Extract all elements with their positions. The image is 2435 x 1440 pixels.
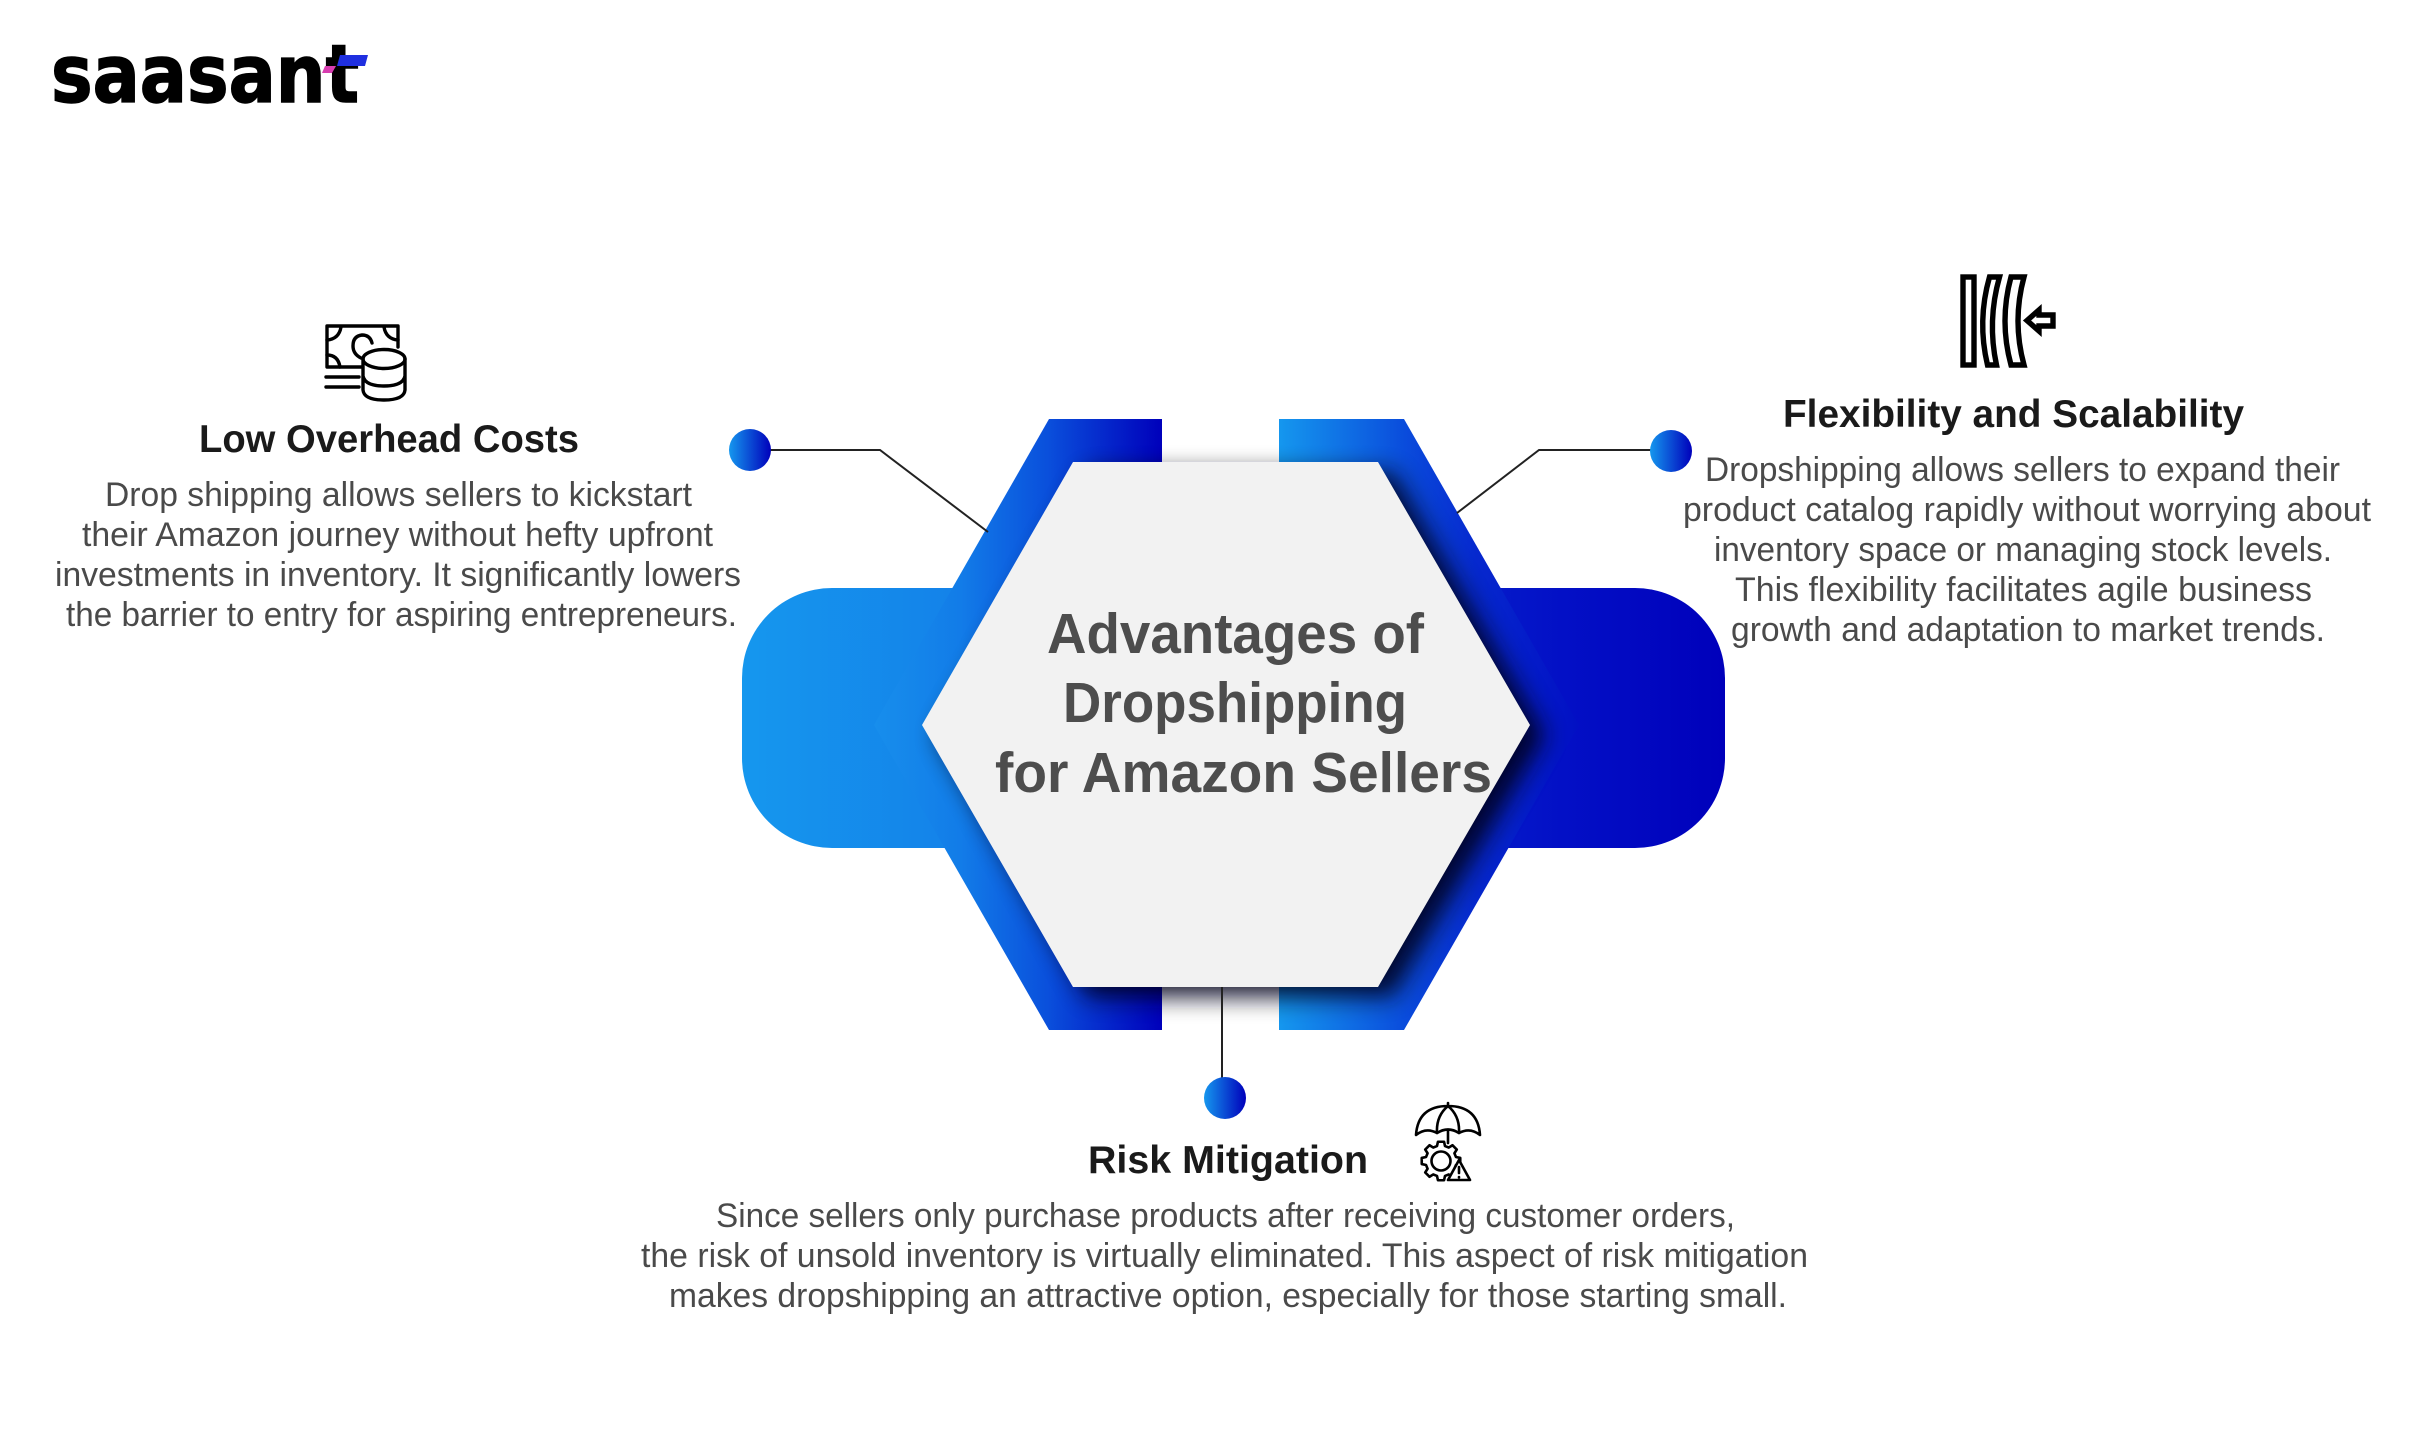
text block: This flexibility facilitates agile business	[1735, 571, 2312, 609]
title: for Amazon Sellers	[995, 741, 1492, 805]
left hexagon half	[874, 419, 1162, 1030]
heading: Risk Mitigation	[1088, 1139, 1368, 1182]
panel: low overhead costs	[55, 326, 741, 634]
text block: Dropshipping allows sellers to expand their	[1705, 451, 2340, 489]
title: Advantages of	[1047, 602, 1425, 666]
text block	[641, 1197, 1808, 1315]
text block	[1683, 451, 2372, 649]
connector: low overhead costs	[729, 429, 988, 532]
title	[995, 602, 1492, 805]
inner hexagon	[922, 462, 1530, 987]
text block: their Amazon journey without hefty upfront	[82, 516, 714, 554]
icon: umbrella with gear and warning	[1416, 1103, 1480, 1180]
text block: investments in inventory. It significantly lowers	[55, 556, 741, 594]
hexagon shadow	[937, 472, 1545, 997]
text block: inventory space or managing stock levels.	[1714, 531, 2332, 569]
connector: risk mitigation	[1204, 987, 1246, 1119]
right hexagon half	[1279, 419, 1579, 1030]
icon: banknote and coins	[326, 326, 405, 400]
connector: flexibility and scalability	[1457, 430, 1692, 513]
text block: the barrier to entry for aspiring entrepreneurs.	[66, 596, 737, 634]
text block: makes dropshipping an attractive option, especially for those starting small.	[669, 1277, 1787, 1315]
text block: Drop shipping allows sellers to kickstart	[105, 476, 693, 514]
icon: flexing bars with arrow	[1963, 277, 2053, 365]
text block: the risk of unsold inventory is virtually eliminated. This aspect of risk mitigation	[641, 1237, 1808, 1275]
heading: Low Overhead Costs	[199, 418, 579, 461]
panel: risk mitigation	[641, 1103, 1808, 1315]
text block: product catalog rapidly without worrying about	[1683, 491, 2372, 529]
panel: central hexagon diagram	[742, 419, 1725, 1030]
logo: saasant: saasant	[51, 28, 359, 121]
heading: Flexibility and Scalability	[1783, 393, 2244, 436]
text block	[55, 476, 741, 634]
right pill	[1380, 588, 1725, 848]
text block: growth and adaptation to market trends.	[1731, 611, 2325, 649]
title: Dropshipping	[1063, 671, 1407, 735]
left pill	[742, 588, 1082, 848]
text block: Since sellers only purchase products after receiving customer orders,	[716, 1197, 1735, 1235]
panel: flexibility and scalability	[1683, 277, 2372, 649]
